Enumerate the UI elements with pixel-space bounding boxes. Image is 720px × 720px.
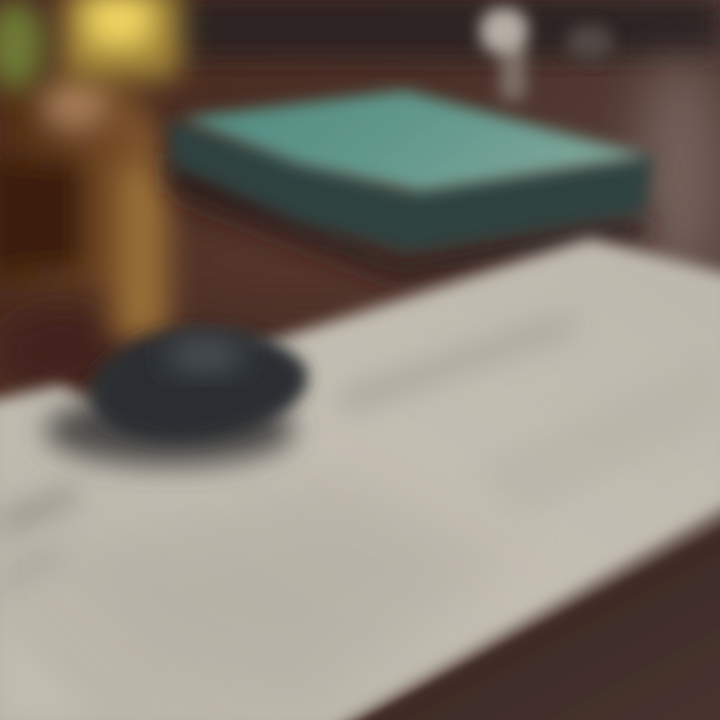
blurred text lines left: [0, 485, 80, 535]
paper shaded bands: [0, 620, 100, 720]
brown vase: [0, 70, 172, 340]
paper sheet: [0, 238, 720, 720]
black pebble object: [45, 328, 308, 466]
green fruit: [0, 0, 45, 90]
glass object: [480, 8, 614, 100]
teal notebook: [165, 90, 652, 280]
pebble shadow: [45, 394, 295, 466]
notebook side: [168, 120, 652, 252]
pebble highlight: [165, 337, 245, 373]
dark table corner: [335, 520, 720, 720]
blurred text line: [335, 315, 578, 412]
pebble body: [90, 328, 308, 441]
notebook shadow: [165, 150, 650, 280]
notebook cover: [180, 90, 648, 192]
yellow candle glow: [62, 0, 182, 80]
